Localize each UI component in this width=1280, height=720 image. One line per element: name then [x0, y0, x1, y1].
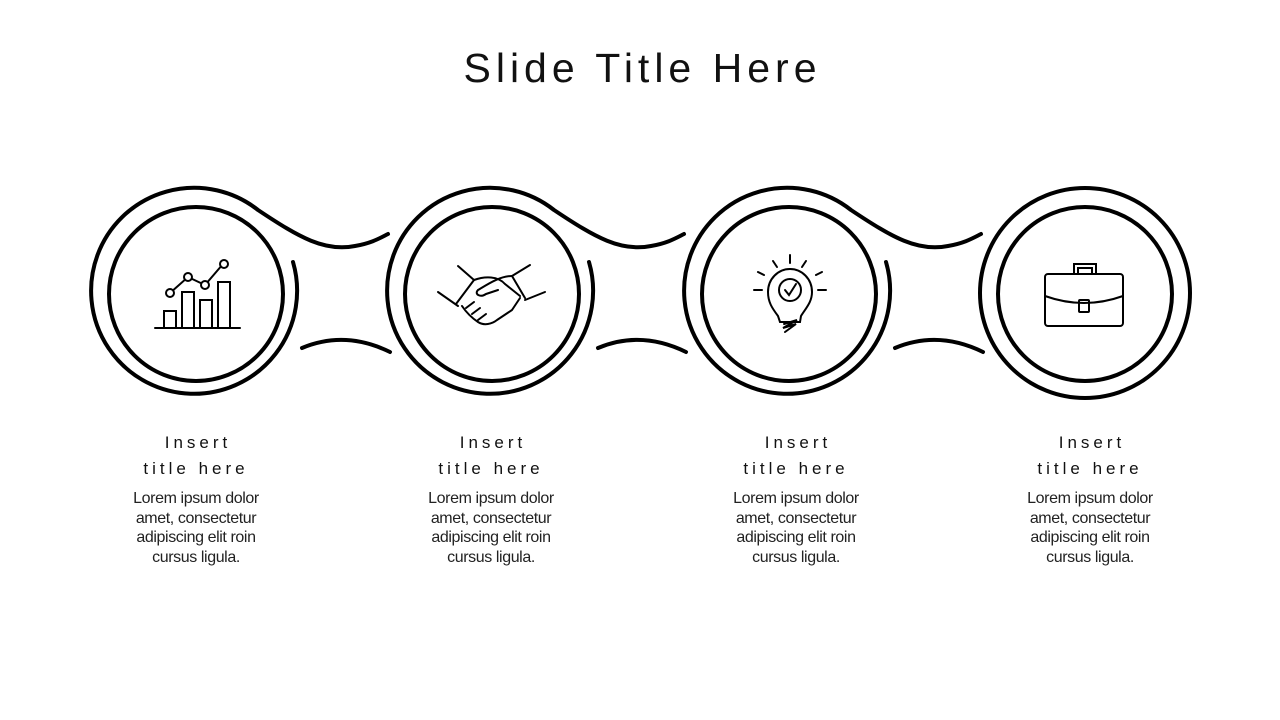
text block 4: Lorem ipsum dolor [1027, 490, 1153, 507]
text block 4: title here [1037, 459, 1143, 478]
text block 2: cursus ligula. [447, 548, 535, 566]
text block 2: adipiscing elit roin [431, 529, 551, 546]
circle 3 with connector [684, 188, 983, 394]
circle 1 with connector [91, 188, 390, 394]
text block 3: Insert [765, 433, 831, 452]
text block 4: amet, consectetur [1030, 510, 1150, 526]
text block 3: amet, consectetur [736, 510, 856, 526]
text block 2 [428, 433, 554, 566]
text block 4 [1027, 433, 1153, 566]
text block 3: adipiscing elit roin [736, 529, 856, 546]
icon: briefcase [1045, 264, 1123, 326]
circle 2 with connector [387, 188, 686, 394]
icon: bar chart [155, 260, 240, 328]
circle 4 [980, 188, 1190, 398]
text block 4: adipiscing elit roin [1030, 529, 1150, 546]
icon: handshake [438, 265, 545, 324]
icon: light bulb [754, 255, 826, 332]
text block 1: title here [143, 459, 249, 478]
title: Slide Title Here [463, 45, 822, 91]
text block 1: cursus ligula. [152, 548, 240, 566]
text block 1: Lorem ipsum dolor [133, 490, 259, 507]
text block 3: cursus ligula. [752, 548, 840, 566]
text block 3 [733, 433, 859, 566]
text block 4: Insert [1059, 433, 1125, 452]
text block 2: Lorem ipsum dolor [428, 490, 554, 507]
text block 1: amet, consectetur [136, 510, 256, 526]
text block 3: title here [743, 459, 849, 478]
text block 1 [133, 433, 259, 566]
text block 1: adipiscing elit roin [136, 529, 256, 546]
text block 4: cursus ligula. [1046, 548, 1134, 566]
text block 3: Lorem ipsum dolor [733, 490, 859, 507]
text block 2: title here [438, 459, 544, 478]
text block 2: amet, consectetur [431, 510, 551, 526]
text block 1: Insert [165, 433, 231, 452]
text block 2: Insert [460, 433, 526, 452]
